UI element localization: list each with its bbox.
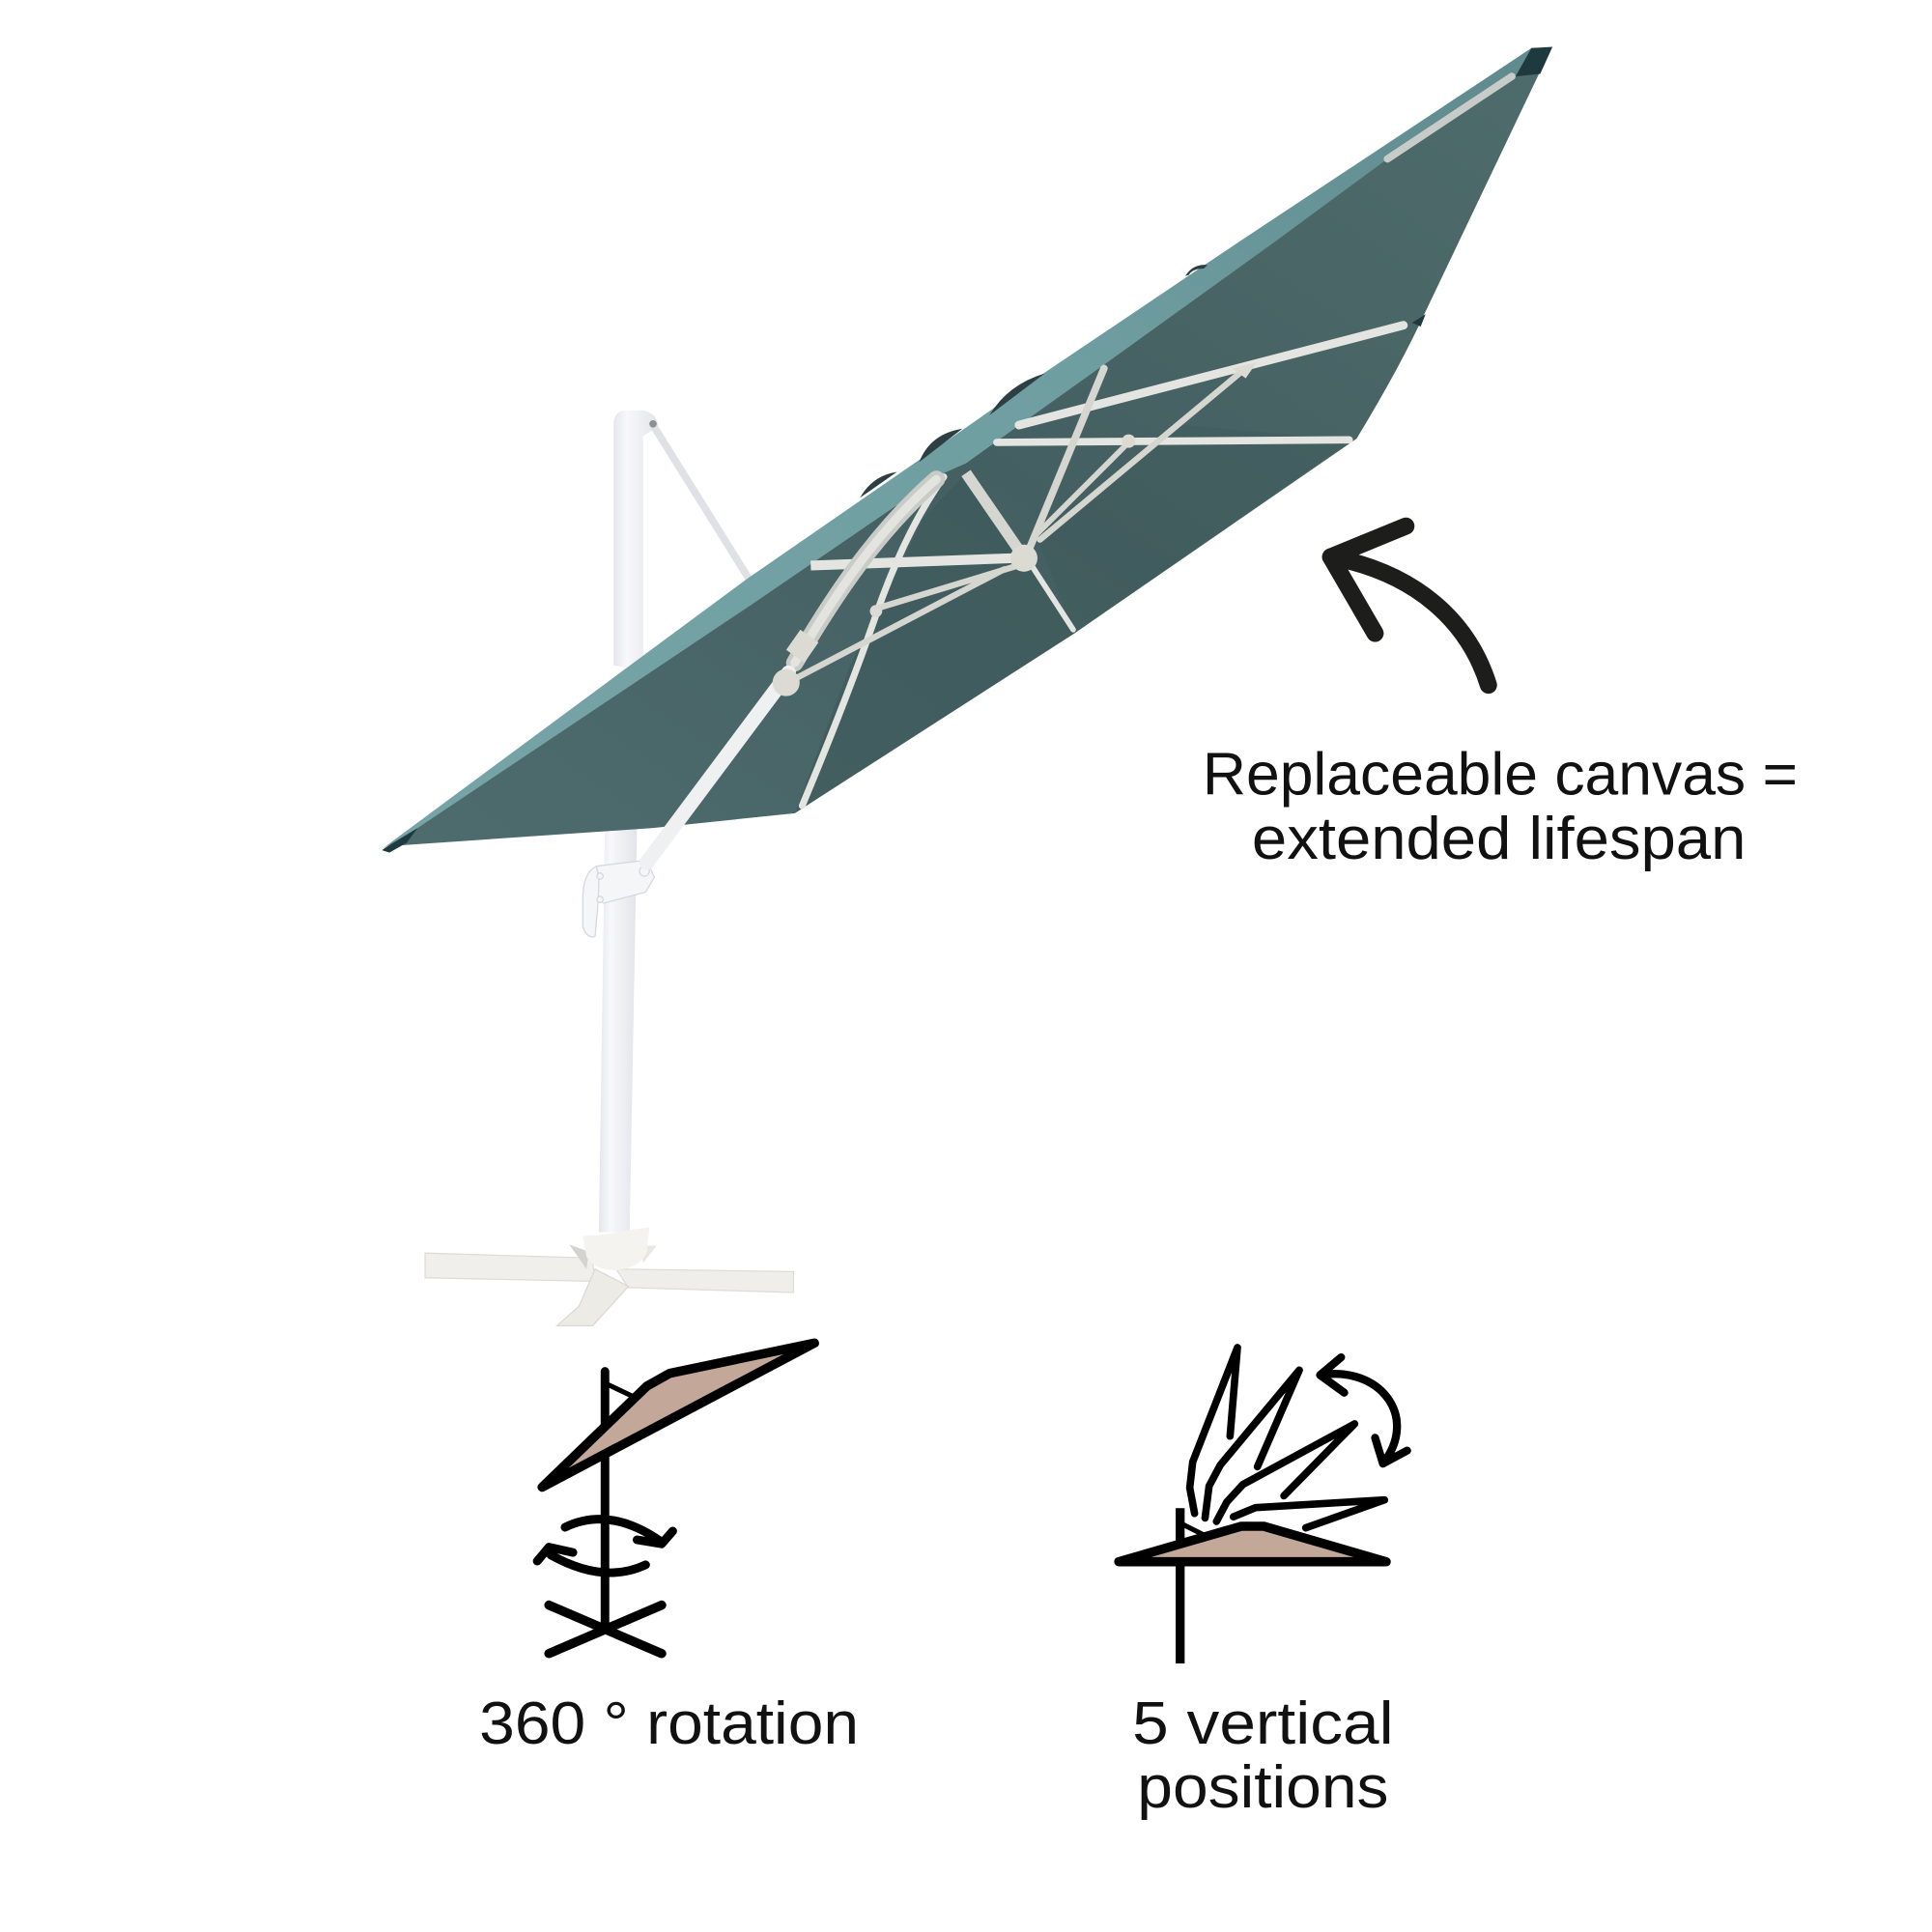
icon: 360 degree rotation [537, 1343, 814, 1654]
canopy ribs [795, 76, 1512, 806]
cross base [425, 1227, 793, 1325]
tilt handle bracket [582, 860, 654, 937]
canopy tips [382, 46, 1552, 853]
label: 5 vertical positions: positions [1137, 1753, 1388, 1821]
text: replaceable canvas callout: Replaceable canvas = [1203, 741, 1798, 809]
lower mast [599, 826, 637, 1233]
arrow: curved pointer to canopy [1331, 526, 1489, 685]
label: 5 vertical positions [1132, 1690, 1394, 1821]
canopy light edge strip [382, 48, 1531, 849]
darker inner canopy panel [795, 473, 1074, 813]
label: 360 rotation: 360 ° rotation [479, 1690, 859, 1757]
text: replaceable canvas callout: extended lifespan [1252, 805, 1746, 872]
main tilt arm [647, 479, 936, 863]
parasol photo illustration [382, 46, 1552, 1325]
canopy underside fabric [382, 48, 1551, 850]
icon: 5 vertical positions [1119, 1348, 1407, 1663]
text: replaceable canvas callout [1203, 741, 1798, 872]
rib joints and hub [773, 362, 1257, 696]
darker right canopy panel [1040, 425, 1351, 634]
top fabric straps [860, 265, 1208, 497]
upper mast and brace [613, 411, 750, 671]
label: 5 vertical positions: 5 vertical [1132, 1690, 1394, 1757]
